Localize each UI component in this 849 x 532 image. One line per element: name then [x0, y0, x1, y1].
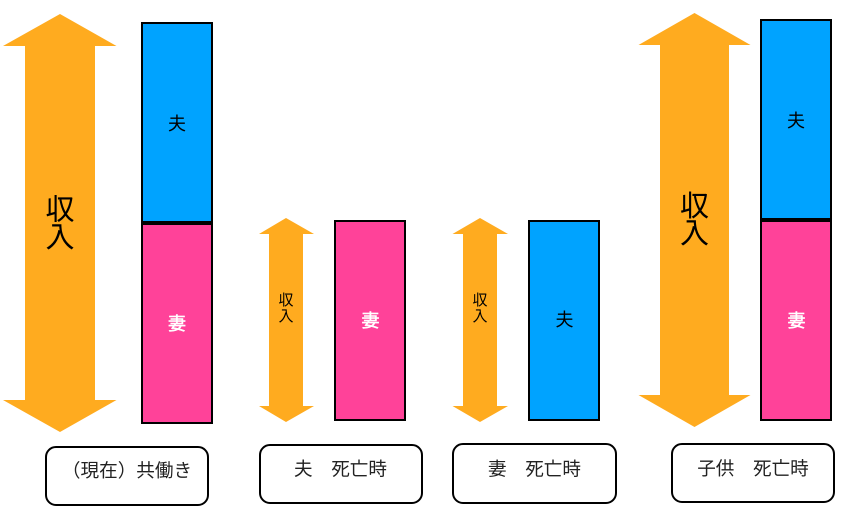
- bar segment: husband: 夫: [787, 111, 805, 131]
- scenario: child dies: [638, 13, 834, 502]
- arrow: income, child dies: [638, 13, 750, 427]
- bar segment: wife: 妻: [168, 314, 186, 334]
- arrow: income, dual income: [3, 14, 116, 432]
- label: husband dies: 夫 死亡時: [294, 458, 387, 480]
- bar segment: husband: [761, 20, 831, 219]
- bar: husband only: [529, 221, 599, 420]
- label: currently dual income: [46, 447, 208, 505]
- label: currently dual income: （現在）共働き: [62, 460, 192, 481]
- scenario: husband dies: [259, 218, 422, 503]
- scenario: wife dies: [452, 218, 616, 503]
- arrow: income, child dies: 入: [680, 218, 709, 250]
- label: husband dies: [260, 445, 422, 503]
- bar segment: wife: [142, 224, 212, 423]
- arrow: income, husband dies: 収: [278, 292, 294, 309]
- bar: wife only: 妻: [362, 311, 380, 331]
- arrow: income, husband dies: 入: [278, 308, 294, 325]
- arrow: income, dual income: 入: [45, 222, 75, 254]
- arrow: income, wife dies: 入: [472, 308, 488, 325]
- label: wife dies: [453, 444, 616, 503]
- bar segment: husband: [142, 23, 212, 222]
- scenario: currently dual income: [3, 14, 212, 505]
- bar: husband only: 夫: [556, 310, 574, 330]
- arrow: income, husband dies: [259, 218, 314, 422]
- bar segment: wife: 妻: [788, 311, 806, 331]
- arrow: income, dual income: 収: [45, 194, 75, 226]
- label: wife dies: 妻 死亡時: [488, 458, 581, 480]
- bar: wife only: [335, 221, 405, 420]
- bar segment: wife: [761, 221, 831, 420]
- label: child dies: 子供 死亡時: [697, 458, 809, 479]
- arrow: income, wife dies: [452, 218, 508, 422]
- arrow: income, child dies: 収: [680, 191, 709, 223]
- arrow: income, wife dies: 収: [472, 292, 488, 309]
- bar segment: husband: 夫: [168, 114, 186, 134]
- label: child dies: [672, 444, 834, 502]
